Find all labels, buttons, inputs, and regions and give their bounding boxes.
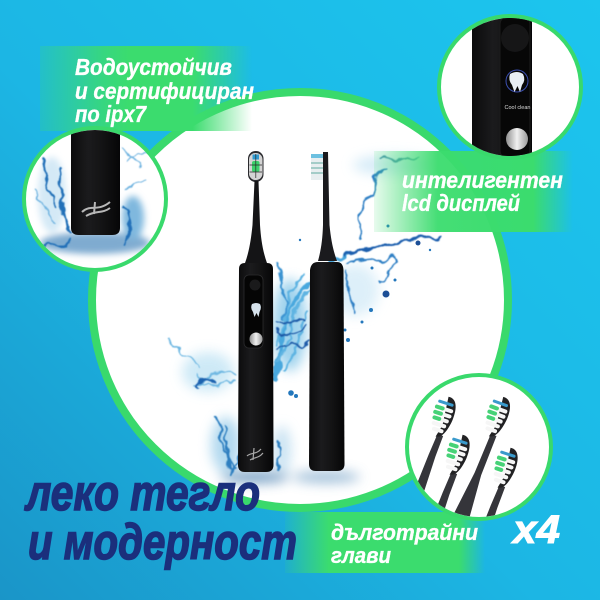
heading: long-lasting heads: дълготрайни [331, 520, 479, 545]
tooth icon [251, 303, 261, 317]
handle inset [71, 120, 120, 235]
heading: long-lasting heads [331, 520, 479, 568]
banner: waterproof [40, 46, 252, 131]
logo inset [82, 202, 110, 216]
main title: и модерност [28, 514, 297, 570]
toothbrush front view [238, 151, 274, 472]
central white circle with green ring [92, 92, 508, 508]
heading: lcd display: интелигентен [402, 167, 563, 193]
button [250, 332, 262, 346]
bristles [311, 154, 323, 180]
heading: waterproof [75, 54, 254, 127]
heading: waterproof: и сертифициран [75, 78, 254, 104]
handle [309, 262, 344, 471]
heading: waterproof: по ipx7 [75, 101, 147, 127]
power dot [250, 280, 260, 290]
main title [24, 465, 297, 570]
heading: lcd display [402, 167, 563, 216]
brush head A [418, 396, 456, 491]
power dot inset [501, 24, 529, 52]
logo [247, 448, 263, 460]
heading: long-lasting heads: глави [331, 543, 392, 568]
heading: waterproof: Водоустойчив [75, 54, 232, 80]
neck [245, 181, 267, 263]
brush head D [486, 448, 518, 516]
display panel inset [500, 15, 530, 160]
neck [318, 152, 337, 261]
handle [238, 263, 274, 472]
brush head C [454, 396, 510, 516]
water splash [168, 155, 440, 483]
banner: long-lasting heads [285, 512, 485, 573]
brush head B [438, 434, 470, 508]
splash inset [35, 150, 150, 254]
display panel [244, 275, 263, 348]
tooth icon inset [509, 72, 524, 92]
quantity label: x4 [511, 508, 560, 552]
inset circle: lcd display [439, 10, 581, 160]
tooth ring [506, 70, 528, 92]
toothbrush side view [309, 152, 344, 471]
handle inset [472, 10, 532, 160]
banner: lcd display [374, 151, 573, 232]
inset circle: waterproof handle [24, 120, 166, 270]
button inset [506, 128, 528, 150]
brush head front [248, 151, 264, 182]
status label: Cool clean [504, 105, 530, 111]
inset circle: replacement heads [405, 373, 553, 521]
heading: lcd display: lcd дисплей [402, 190, 520, 216]
main title: леко тегло [24, 465, 260, 521]
